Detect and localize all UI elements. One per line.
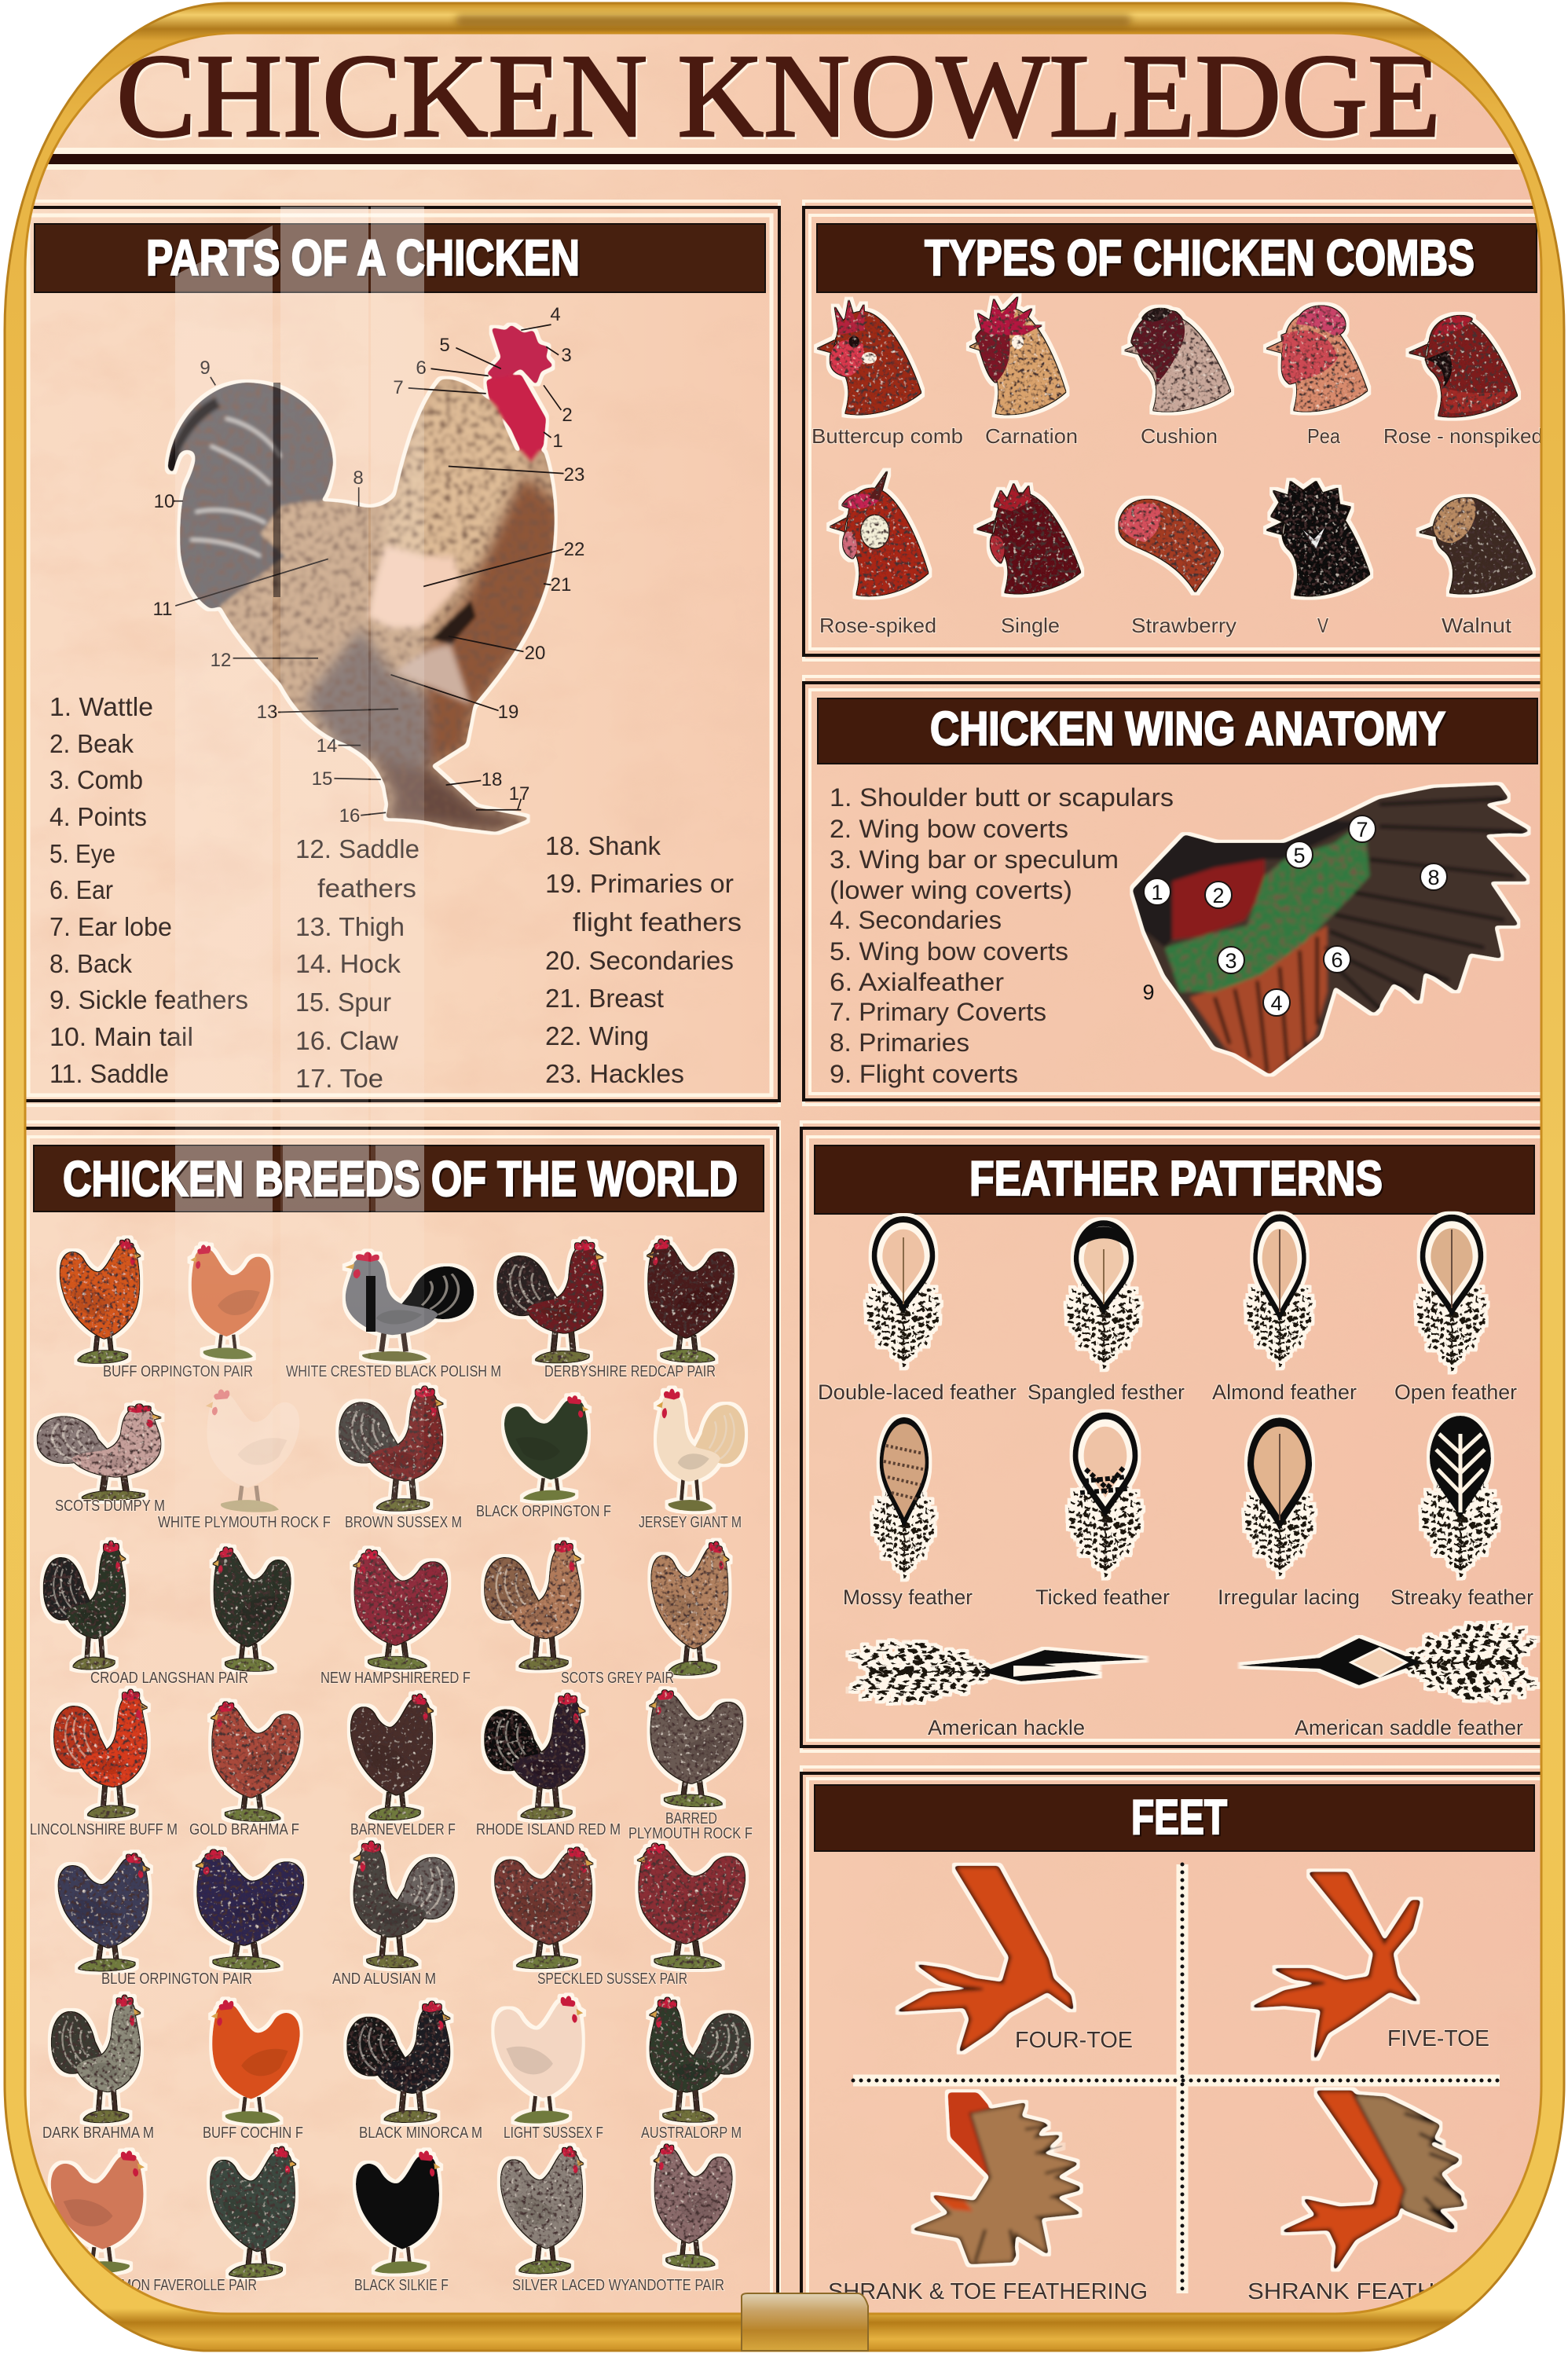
comb: walnut: Walnut [1442,614,1512,637]
feather: american hackle: American hackle [928,1716,1085,1739]
foot: shank and toe feathering [828,2092,1148,2304]
feather: american saddle [1240,1623,1533,1739]
label: scots grey pair: SCOTS GREY PAIR [561,1670,674,1687]
wing list: 8. Primaries [830,1028,969,1057]
label: derbyshire redcap pair: DERBYSHIRE REDCAP PAIR [544,1363,716,1380]
chicken: silver laced wyandotte male [501,2146,584,2273]
header bar [35,224,765,292]
foot: shank and toe feathering: SHRANK & TOE FEATHERING [828,2279,1148,2304]
parts list column 1: 8. Back [49,949,132,978]
comb: carnation: Carnation [985,424,1078,448]
feather: almond: Almond feather [1212,1380,1357,1404]
diagram numbers: 7 [393,377,404,398]
feather: american saddle: American saddle feather [1295,1716,1523,1739]
chicken: white crested black polish [345,1252,474,1362]
comb: rose-spiked [819,471,936,637]
feather: ticked: Ticked feather [1035,1585,1170,1609]
diagram numbers [153,304,584,827]
comb: pea: Pea [1307,424,1340,448]
header bar: FEET [1131,1791,1227,1845]
feather: spangled [1028,1223,1185,1404]
wing list: 9. Flight coverts [830,1060,1018,1088]
parts list column 2: 13. Thigh [295,912,405,941]
label: brown sussex: BROWN SUSSEX M [345,1514,462,1531]
wing numbers: 5 [1293,844,1306,867]
diagram numbers: 5 [439,335,450,356]
comb: cushion: Cushion [1141,424,1218,448]
wing numbers: 3 [1225,949,1237,973]
parts list column 3 [545,831,742,1088]
parts list column 1: 2. Beak [49,729,134,758]
wing list: 2. Wing bow coverts [830,815,1068,843]
header bar: CHICKEN WING ANATOMY [930,702,1445,755]
parts list column 2: 14. Hock [295,949,401,978]
wing list: 5. Wing bow coverts [830,937,1068,966]
panel: feet [801,1767,1562,2348]
feather: spangled: Spangled festher [1028,1380,1185,1404]
panel frame [804,201,1564,660]
wing numbers: 2 [1212,884,1225,907]
label: faverolle pair: SALMON FAVEROLLE PAIR [97,2277,257,2294]
parts list column 1: 4. Points [49,802,147,831]
feather: ticked [1035,1416,1170,1609]
wing list: 1. Shoulder butt or scapulars [830,783,1174,812]
label: barred plymouth rock: BARRED [665,1810,717,1827]
chicken: speckled sussex female [495,1847,593,1968]
diagram numbers: 4 [550,304,561,325]
icon: wing [1133,785,1532,1075]
label: white plymouth rock: WHITE PLYMOUTH ROCK F [158,1514,331,1531]
label: black minorca: BLACK MINORCA M [359,2124,482,2142]
wing list [830,783,1174,1088]
label: lincolnshire buff: LINCOLNSHIRE BUFF M [30,1821,178,1838]
parts list column 3: 21. Breast [545,984,664,1013]
chicken: brown sussex [339,1386,443,1511]
panel frame [801,1122,1562,1751]
parts list column 3: 19. Primaries or [545,869,734,898]
diagram numbers: 20 [525,643,545,664]
chicken: blue orpington female [59,1853,149,1970]
label: barred plymouth rock [628,1810,753,1842]
parts list column 2: 16. Claw [295,1026,398,1055]
diagram numbers: 19 [498,702,518,723]
header bar: PARTS OF A CHICKEN [146,229,580,286]
parts list column 1 [49,692,248,1088]
label: new hampshire red: NEW HAMPSHIRERED F [321,1670,471,1687]
comb: single: Single [1001,614,1060,637]
chicken: blue orpington male [196,1849,303,1969]
label: australorp: AUSTRALORP M [641,2124,742,2142]
label: silver laced wyandotte pair: SILVER LACED WYANDOTTE PAIR [512,2277,724,2294]
parts list column 3: 18. Shank [545,831,661,860]
label: speckled sussex pair: SPECKLED SUSSEX PAIR [537,1970,687,1988]
parts list column 1: 1. Wattle [49,692,153,721]
label: black silkie: BLACK SILKIE F [354,2277,449,2294]
title rule [0,148,1568,170]
chicken: derbyshire redcap female [647,1239,734,1362]
chicken: light sussex [494,1996,583,2124]
wing numbers: 6 [1331,948,1343,972]
feather: irregular lacing: Irregular lacing [1218,1585,1360,1609]
comb: rose nonspiked: Rose - nonspiked [1383,424,1543,448]
chicken: silver laced wyandotte female [654,2144,732,2267]
diagram numbers: 13 [257,702,277,723]
wing numbers: 9 [1142,981,1155,1004]
label: light sussex: LIGHT SUSSEX F [504,2124,603,2142]
panel: feather patterns [801,1122,1562,1751]
feather: mossy [843,1420,973,1609]
parts list column 3: 23. Hackles [545,1059,684,1088]
label: rhode island red: RHODE ISLAND RED M [476,1821,621,1838]
diagram numbers: 11 [153,599,172,620]
diagram numbers: 6 [416,357,427,379]
comb: buttercup: Buttercup comb [811,424,963,448]
comb: walnut [1420,498,1532,637]
label: gold brahma: GOLD BRAHMA F [189,1821,299,1838]
parts list column 1: 3. Comb [49,765,143,794]
diagram numbers: 22 [564,539,584,560]
parts list column 1: 6. Ear [49,875,113,904]
chicken: gold brahma [211,1702,300,1821]
header bar: FEATHER PATTERNS [969,1152,1383,1206]
comb: buttercup [811,300,963,448]
foot: four-toe: FOUR-TOE [1015,2028,1133,2053]
label: barred plymouth rock: PLYMOUTH ROCK F [628,1825,753,1842]
header bar [815,1785,1534,1851]
chicken: barnevelder [351,1694,434,1820]
chicken: croad langshan female [213,1547,291,1671]
chicken: scots grey female [651,1541,729,1675]
feather: irregular lacing [1218,1422,1360,1609]
parts list column 3: flight feathers [573,907,742,937]
wing numbers [1142,816,1447,1016]
panel: types of chicken combs [804,201,1564,660]
chicken: rhode island red [485,1693,585,1819]
chicken: buff cochin [211,2000,300,2124]
comb: pea [1267,306,1367,448]
feather: almond [1212,1218,1357,1404]
chicken: white plymouth rock [206,1389,299,1512]
rooster diagram [153,304,584,832]
diagram numbers: 10 [154,491,174,512]
label: dark brahma: DARK BRAHMA M [42,2124,154,2142]
feather: open [1394,1218,1517,1404]
chicken: andalusian [354,1841,454,1967]
diagram numbers: 17 [509,783,529,805]
feather: double-laced [818,1219,1017,1404]
title: CHICKEN KNOWLEDGE [116,30,1441,162]
label: croad langshan pair: CROAD LANGSHAN PAIR [90,1670,248,1687]
wing list: 6. Axialfeather [830,968,1004,996]
parts list column 2: feathers [317,874,416,903]
parts list column 2: 12. Saddle [295,834,419,863]
header bar: CHICKEN BREEDS OF THE WORLD [63,1152,738,1207]
chicken: new hampshire red [354,1549,447,1669]
diagram numbers: 3 [561,345,572,366]
chicken: derbyshire redcap male [497,1240,603,1362]
parts list column 1: 10. Main tail [49,1022,193,1051]
foot: shank feathering [1247,2091,1512,2304]
diagram numbers: 16 [339,805,360,827]
icon: rooster [168,324,561,832]
chicken: barred plymouth rock [650,1690,742,1806]
frame clip [742,2293,868,2351]
comb: cushion [1125,309,1230,448]
diagram numbers: 21 [551,574,571,596]
panel frame [804,676,1564,1105]
feather: streaky [1390,1416,1533,1609]
panel: chicken wing anatomy [804,676,1564,1105]
diagram numbers: 12 [211,650,231,671]
wing numbers: 8 [1427,866,1440,889]
label: white crested black polish: WHITE CRESTED BLACK POLISH M [286,1363,501,1380]
parts list column 2: 17. Toe [295,1064,383,1093]
chicken: lincolnshire buff [54,1690,147,1818]
header bar [815,1146,1534,1214]
label: scots dumpy: SCOTS DUMPY M [55,1497,165,1515]
wing illustration [1133,785,1532,1075]
chicken: black orpington [504,1395,588,1501]
chicken: scots dumpy [38,1404,161,1500]
panel: parts of a chicken [22,201,779,1105]
label: black orpington: BLACK ORPINGTON F [476,1503,611,1520]
parts list column 2 [295,834,419,1093]
foot: shank feathering: SHRANK FEATHERING [1247,2279,1512,2304]
parts list column 1: 7. Ear lobe [49,912,172,941]
diagram numbers: 9 [200,357,211,379]
panel frame [22,201,779,1105]
frame top shading [456,15,1131,26]
chicken: dark brahma [52,1996,140,2122]
chicken: buff orpington female [190,1244,270,1359]
wing numbers: 4 [1270,992,1283,1015]
wing list: 4. Secondaries [830,906,1002,934]
wing numbers: 7 [1356,818,1368,841]
chicken: salmon faverolle male [211,2146,295,2277]
feather: american hackle [853,1641,1147,1739]
wing list: (lower wing coverts) [830,876,1072,904]
chicken: salmon faverolle female [51,2150,145,2274]
header bar [818,698,1537,764]
feather: double-laced: Double-laced feather [818,1380,1017,1404]
label: buff cochin: BUFF COCHIN F [203,2124,303,2142]
diagram numbers: 8 [353,467,364,489]
foot: five-toe: FIVE-TOE [1387,2026,1489,2051]
comb: strawberry: Strawberry [1131,614,1236,637]
label: barnevelder: BARNEVELDER F [350,1821,456,1838]
parts list column 1: 5. Eye [49,839,115,868]
chicken: buff orpington hen [60,1239,141,1363]
chicken: speckled sussex male [638,1843,745,1968]
parts list column 1: 9. Sickle feathers [49,985,248,1014]
label: andalusian: AND ALUSIAN M [332,1970,436,1988]
glass reflection strips [175,207,424,1650]
feather: mossy: Mossy feather [843,1585,973,1609]
comb: v: V [1317,614,1329,637]
foot: five-toe [1252,1873,1489,2059]
chicken: black silkie [356,2150,440,2274]
comb: rose-spiked: Rose-spiked [819,614,936,637]
chicken: australorp [650,1997,750,2122]
feather: open: Open feather [1394,1380,1517,1404]
parts list column 3: 20. Secondaries [545,946,734,975]
label: blue orpington pair: BLUE ORPINGTON PAIR [101,1970,252,1988]
chicken: jersey giant [657,1388,745,1511]
header bar [817,224,1537,292]
parts list column 1: 11. Saddle [49,1059,169,1088]
comb: v [1267,482,1369,637]
comb: rose nonspiked [1383,316,1543,448]
panel frame [801,1767,1562,2348]
panel: chicken breeds of the world [22,1122,779,2348]
panel frame [22,1122,779,2348]
leader lines [173,324,564,816]
parts list column 3: 22. Wing [545,1021,649,1050]
wing list: 7. Primary Coverts [830,998,1046,1026]
wing list: 3. Wing bar or speculum [830,845,1119,874]
comb: carnation [970,297,1078,448]
wing numbers: 1 [1151,881,1163,904]
diagram numbers: 1 [552,431,563,452]
chicken: croad langshan male [44,1541,126,1670]
comb: strawberry [1119,500,1236,637]
diagram numbers: 14 [317,735,337,757]
chicken: scots grey male [485,1541,581,1670]
chicken: black minorca [347,2001,450,2122]
label: jersey giant: JERSEY GIANT M [639,1514,742,1531]
foot: four-toe [898,1867,1133,2053]
diagram numbers: 15 [312,768,332,790]
dotted dividers [853,1864,1500,2293]
label: buff orpington pair: BUFF ORPINGTON PAIR [103,1363,253,1380]
diagram numbers: 2 [562,405,573,426]
comb: single [977,484,1080,637]
header bar [34,1146,764,1211]
diagram numbers: 18 [482,769,502,790]
parts list column 2: 15. Spur [295,988,391,1017]
diagram numbers: 23 [564,464,584,486]
feather: streaky: Streaky feather [1390,1585,1533,1609]
